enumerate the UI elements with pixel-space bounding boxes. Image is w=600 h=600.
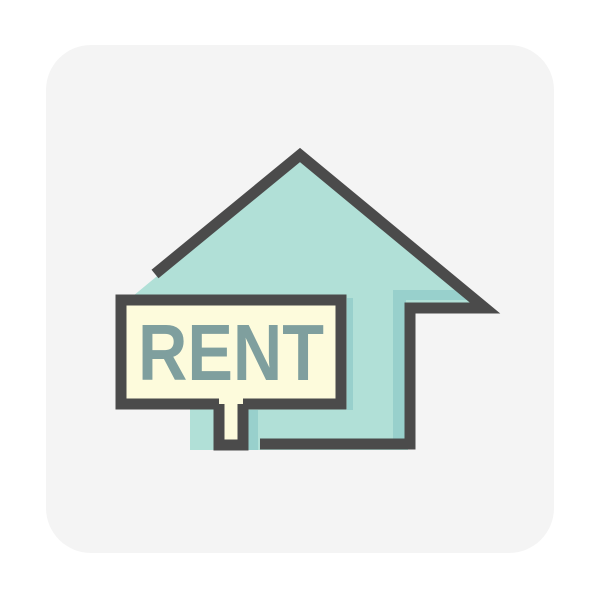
sign text: RENT xyxy=(138,308,324,397)
house arrow xyxy=(133,155,485,450)
background tile xyxy=(46,45,554,553)
rent sign xyxy=(121,298,353,450)
